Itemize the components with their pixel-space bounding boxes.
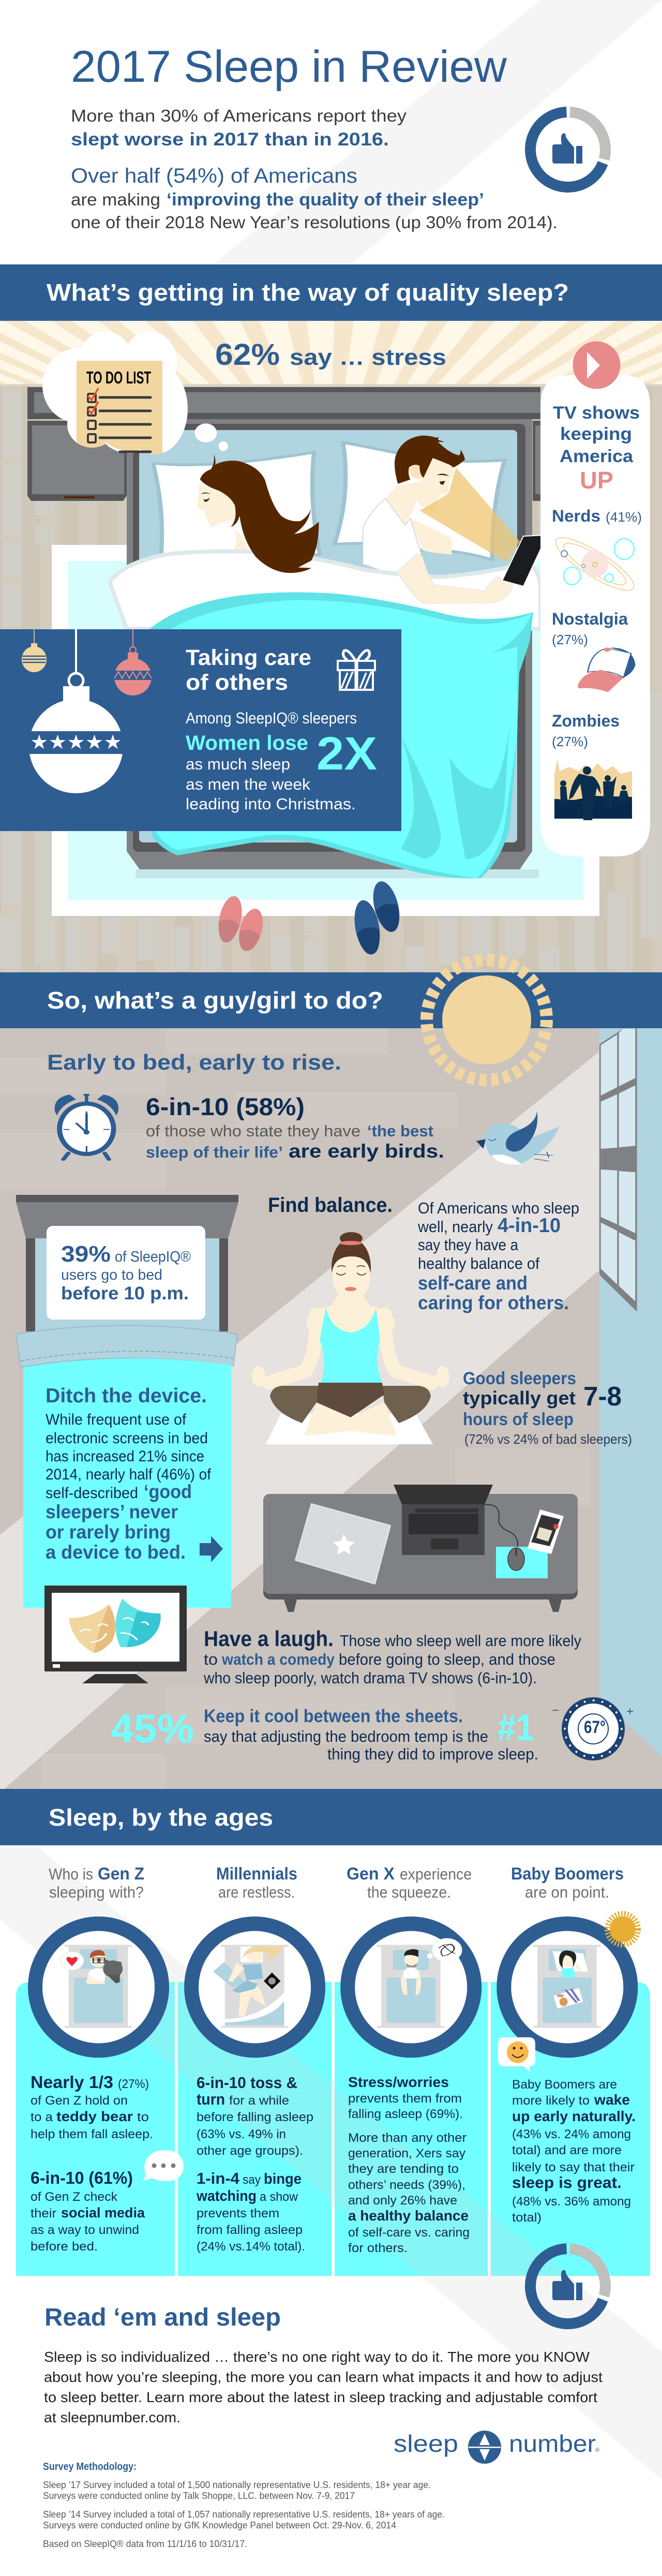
- body: While frequent use of: [46, 1411, 187, 1428]
- stat: good sleepers: 7-8: [583, 1382, 622, 1412]
- column text: baby boomers: likely to say that their: [512, 2160, 635, 2174]
- column text: gen x: Stress/worries: [348, 2074, 449, 2090]
- column text: baby boomers: total) and are more: [512, 2143, 622, 2157]
- stat text: before 10 p.m.: [61, 1283, 189, 1304]
- stat: 6-in-10 early birds: of those who state they have: [146, 1122, 360, 1140]
- TV shows heading: UP: [580, 467, 613, 494]
- heading: Ditch the device.: [46, 1385, 207, 1407]
- tablet: [502, 535, 547, 586]
- stat text: 39%: [61, 1241, 111, 1267]
- pillow right: [335, 442, 505, 560]
- section backdrop: wall with light beam: [0, 1028, 662, 1789]
- column text: millennials: other age groups).: [197, 2144, 303, 2158]
- panel: taking care of others: [0, 629, 401, 831]
- column text: gen x: for others.: [348, 2241, 408, 2255]
- diagonal grey band behind intro: [213, 0, 662, 264]
- text: have a laugh: [203, 1626, 581, 1687]
- column text: millennials: binge: [264, 2171, 302, 2187]
- survey methodology: Surveys were conducted online by GfK Knowledge Panel between Oct. 29-Nov. 6, 2014: [43, 2520, 396, 2530]
- legs: [304, 1402, 397, 1435]
- stat: 45% keep it cool: 45%: [111, 1706, 194, 1751]
- column text: millennials: watching: [196, 2188, 257, 2204]
- heading bar: so what's a guy/girl to do: [0, 972, 662, 1028]
- intro text block: are making: [71, 190, 160, 209]
- heading bar: what's getting in the way: What’s getting in the way of quality sleep?: [47, 279, 569, 306]
- column text: gen z: help them fall asleep.: [31, 2127, 153, 2141]
- icon: bird: [476, 1111, 560, 1164]
- pillow: [47, 1226, 205, 1320]
- heading bar: sleep by the ages: Sleep, by the ages: [49, 1804, 273, 1831]
- phone: [528, 1509, 564, 1554]
- stat: good sleepers: Good sleepers: [463, 1369, 576, 1388]
- column headings: Who is: [49, 1865, 93, 1883]
- text: balance stat: well, nearly: [417, 1218, 493, 1236]
- column text: gen z: before bed.: [31, 2240, 98, 2254]
- text: balance stat: [417, 1199, 579, 1313]
- closing paragraph: at sleepnumber.com.: [44, 2409, 180, 2425]
- panels: cyan generation columns: [16, 1982, 650, 2276]
- title: 2017 Sleep in Review: [71, 42, 507, 92]
- stat: 62% say stress: 62%: [215, 338, 280, 372]
- text: have a laugh: who sleep poorly, watch drama TV shows (6-in-10).: [203, 1669, 537, 1687]
- column text: millennials: 6-in-10 toss &: [197, 2074, 297, 2092]
- column text: baby boomers: total): [512, 2211, 541, 2225]
- icon: thermostat: 67°: [584, 1718, 606, 1737]
- illustration: desk with devices: [263, 1485, 578, 1612]
- stat: 45% keep it cool: [111, 1706, 538, 1763]
- illustration: gen z in bed: [61, 1945, 132, 2028]
- column text: gen z: of Gen Z check: [31, 2190, 118, 2204]
- heading: find balance: Find balance.: [268, 1194, 393, 1217]
- column headings: Millennials: [216, 1864, 297, 1883]
- icon: morning sun: [607, 1914, 638, 1945]
- heading: early to bed: Early to bed, early to rise.: [47, 1050, 341, 1074]
- nostalgia label: (27%): [552, 632, 588, 647]
- ornament small tan: [22, 629, 47, 672]
- icon: donut with thumbs up (closing): [531, 2249, 605, 2324]
- desk legs: [284, 1600, 562, 1612]
- survey methodology: Sleep ’14 Survey included a total of 1,057 nationally representative U.S. residents, 18+ years of age.: [43, 2509, 445, 2520]
- body: electronic screens in bed: [46, 1430, 208, 1447]
- illustration: baby boomer in bed: [533, 1945, 601, 2028]
- woman face: [197, 482, 251, 553]
- stat: 6-in-10 early birds: 6-in-10 (58%): [146, 1093, 305, 1120]
- closing paragraph: Sleep is so individualized … there’s no one right way to do it. The more you KNOW: [44, 2349, 590, 2365]
- icon: thermostat: +: [626, 1705, 634, 1719]
- man shirt and neck: [385, 482, 419, 525]
- stat: 6-in-10 early birds: [146, 1093, 444, 1162]
- stat: 62% say stress: say … stress: [290, 345, 446, 370]
- body: [46, 1411, 212, 1563]
- stat: 45% keep it cool: #1: [498, 1707, 534, 1749]
- column text: millennials: turn: [197, 2090, 225, 2108]
- column headings: Gen X: [347, 1864, 395, 1883]
- closing paragraph: to sleep better. Learn more about the latest in sleep tracking and adjustable comfort: [44, 2389, 597, 2405]
- column text: gen x: others’ needs (39%),: [348, 2178, 465, 2192]
- TV shows heading: TV shows: [553, 403, 640, 423]
- icon: thermostat: [552, 1697, 634, 1760]
- heading bar: so what's a guy/girl to do: So, what’s a guy/girl to do?: [47, 987, 383, 1014]
- ornament pink: [113, 629, 153, 695]
- column text: millennials: prevents them: [197, 2207, 279, 2220]
- stat: 6-in-10 early birds: sleep of their life’: [146, 1143, 283, 1161]
- column text: millennials: for a while: [229, 2094, 289, 2108]
- column headings: are restless.: [218, 1883, 295, 1901]
- column text: baby boomers: [512, 2078, 636, 2225]
- desktop: [263, 1494, 578, 1600]
- column text: gen x: prevents them from: [348, 2092, 462, 2106]
- column text: gen z: as a way to unwind: [31, 2223, 139, 2237]
- nostalgia label: [552, 610, 628, 647]
- body: 2014, nearly half (46%) of: [46, 1466, 212, 1483]
- thought bubbles: [195, 423, 217, 442]
- column text: millennials: [196, 2074, 313, 2254]
- column text: millennials: before falling asleep: [197, 2110, 313, 2124]
- bedroom scene backdrop: wall rays: [0, 321, 662, 385]
- intro text block: ‘improving the quality of their sleep’: [167, 190, 484, 210]
- couple in bed illustration: [110, 423, 547, 629]
- column text: gen z: (27%): [118, 2077, 149, 2091]
- panel heading: Taking care: [186, 645, 311, 670]
- panel stat text: [186, 709, 377, 813]
- text: balance stat: 4-in-10: [498, 1215, 561, 1237]
- column text: gen x: a healthy balance: [348, 2208, 469, 2224]
- TV shows heading: [553, 403, 640, 494]
- stat text: of SleepIQ®: [115, 1249, 191, 1265]
- column text: millennials: say: [243, 2173, 261, 2187]
- column text: baby boomers: Baby Boomers are: [512, 2078, 617, 2092]
- column text: gen x: More than any other: [348, 2131, 467, 2145]
- nerds label: [552, 507, 642, 525]
- column text: baby boomers: (48% vs. 36% among: [512, 2195, 631, 2209]
- body: or rarely bring: [46, 1521, 171, 1543]
- column text: baby boomers: wake: [594, 2092, 630, 2108]
- icon: play button: [573, 342, 621, 389]
- intro text block: slept worse in 2017 than in 2016.: [71, 129, 389, 150]
- logo: sleep number: sleep: [394, 2430, 458, 2457]
- column text: baby boomers: up early naturally.: [512, 2108, 636, 2124]
- column text: millennials: from falling asleep: [197, 2223, 303, 2237]
- closing paragraph: about how you’re sleeping, the more you can learn what impacts it and how to adjust: [44, 2369, 603, 2385]
- stat: good sleepers: typically get: [463, 1387, 576, 1409]
- column text: gen x: falling asleep (69%).: [348, 2107, 463, 2121]
- column text: gen x: and only 26% have: [348, 2194, 457, 2208]
- column text: gen z: to a: [31, 2110, 53, 2124]
- text: have a laugh: to: [204, 1650, 218, 1668]
- mouse: [508, 1548, 524, 1571]
- body: has increased 21% since: [46, 1448, 204, 1465]
- column text: gen z: of Gen Z hold on: [31, 2094, 128, 2108]
- stat: 62% say stress: [215, 338, 446, 372]
- column text: gen z: Nearly 1/3: [31, 2072, 113, 2092]
- panel stat text: as men the week: [186, 775, 311, 793]
- body: sleepers’ never: [46, 1501, 178, 1522]
- arrow: [200, 1536, 223, 1562]
- to do paper: [77, 361, 162, 459]
- woman hair: [200, 454, 319, 573]
- blanket: [150, 592, 533, 878]
- duvet: [110, 551, 540, 629]
- stat text: [61, 1241, 191, 1304]
- stat text: users go to bed: [61, 1267, 162, 1283]
- neck and shoulders: [306, 1294, 395, 1345]
- heading bar: what's getting in the way: [0, 264, 662, 321]
- body: self-described: [46, 1485, 138, 1502]
- logo: sleep number: [394, 2430, 599, 2464]
- column text: baby boomers: sleep is great.: [512, 2173, 622, 2192]
- tank top: [320, 1308, 382, 1383]
- cable: [485, 1505, 518, 1548]
- column text: millennials: 1-in-4: [197, 2169, 240, 2187]
- intro text block: More than 30% of Americans report they: [71, 106, 407, 125]
- icon: thermostat: −: [552, 1704, 559, 1718]
- column text: gen x: of self-care vs. caring: [348, 2226, 470, 2240]
- column text: baby boomers: (43% vs. 24% among: [512, 2127, 631, 2141]
- icon: pink slippers: [215, 894, 267, 954]
- nostalgia label: Nostalgia: [552, 610, 628, 628]
- text: balance stat: caring for others.: [418, 1292, 569, 1313]
- blanket fold: [16, 1326, 237, 1367]
- icon: sun: [427, 960, 547, 1080]
- closed laptop: [295, 1504, 390, 1584]
- logo: sleep number: number: [509, 2430, 596, 2457]
- floor: [0, 384, 662, 972]
- column text: millennials: (24% vs.14% total).: [197, 2240, 305, 2254]
- column text: millennials: (63% vs. 49% in: [197, 2127, 286, 2141]
- zombies label: (27%): [552, 734, 588, 749]
- open laptop: [394, 1485, 493, 1504]
- panel stat text: Among SleepIQ® sleepers: [186, 709, 357, 727]
- text: balance stat: Of Americans who sleep: [418, 1199, 579, 1217]
- arms: [269, 1314, 432, 1383]
- text: have a laugh: Have a laugh.: [204, 1626, 334, 1651]
- icon: smile bubble: [498, 2037, 535, 2071]
- icon: baseball cap: [578, 647, 636, 692]
- bed frame: [127, 419, 532, 869]
- icon: chat bubble: [142, 2150, 184, 2181]
- stat: 45% keep it cool: Keep it cool between the sheets.: [204, 1706, 463, 1726]
- zombies label: [552, 712, 620, 749]
- mouse pad: [496, 1547, 548, 1578]
- stat: 45% keep it cool: thing they did to improve sleep.: [327, 1745, 538, 1763]
- ornament large white: ★★★★★: [30, 731, 122, 753]
- nerds label: (41%): [606, 509, 642, 525]
- bed with pillow stat: [16, 1195, 238, 1367]
- intro text block: one of their 2018 New Year’s resolutions (up 30% from 2014).: [71, 213, 558, 232]
- panel heading: [186, 645, 311, 695]
- man face: [413, 458, 454, 513]
- phone light beam: [419, 467, 520, 562]
- closing paragraph: [44, 2349, 603, 2425]
- column text: gen x: [348, 2074, 470, 2255]
- survey methodology: Sleep ’17 Survey included a total of 1,500 nationally representative U.S. residents, 18+ year age.: [43, 2480, 431, 2490]
- column text: gen z: to: [137, 2110, 149, 2124]
- head: [340, 1232, 363, 1245]
- man hair: [395, 436, 465, 484]
- column text: baby boomers: more likely to: [512, 2094, 590, 2108]
- column headings: the squeeze.: [367, 1883, 451, 1901]
- column headings: [49, 1864, 624, 1901]
- panel: TV shows: [540, 342, 650, 856]
- column text: gen z: [31, 2072, 153, 2254]
- diagonal grey band behind columns: [0, 1847, 662, 2480]
- panel stat text: Women lose: [186, 732, 308, 754]
- column text: gen z: their: [31, 2207, 56, 2220]
- stat: good sleepers: (72% vs 24% of bad sleepers): [464, 1431, 632, 1447]
- icon: donut with thumbs up: [531, 112, 605, 187]
- thought cloud with to do list: [42, 331, 188, 459]
- TV shows heading: keeping: [560, 424, 632, 444]
- nightstand right: [533, 421, 540, 501]
- column text: gen z: teddy bear: [56, 2109, 133, 2124]
- ornament large white: [26, 629, 127, 793]
- panel heading: of others: [186, 670, 288, 695]
- text: balance stat: self-care and: [418, 1272, 528, 1294]
- illustration: woman meditating: [252, 1232, 449, 1444]
- column headings: sleeping with?: [49, 1883, 144, 1901]
- column headings: Gen Z: [98, 1864, 144, 1883]
- body: ‘good: [144, 1481, 192, 1502]
- intro text block: Over half (54%) of Americans: [71, 165, 357, 187]
- nerds label: Nerds: [552, 507, 600, 525]
- panel stat text: leading into Christmas.: [186, 795, 356, 813]
- column text: gen z: 6-in-10 (61%): [31, 2168, 133, 2187]
- stat: 45% keep it cool: say that adjusting the bedroom temp is the: [204, 1727, 488, 1745]
- icon: alarm clock: [55, 1094, 118, 1160]
- rings: [35, 1924, 630, 2050]
- intro text block: [71, 106, 558, 232]
- icon: blue slippers: [351, 879, 404, 956]
- heading: read em and sleep: Read ‘em and sleep: [44, 2304, 281, 2331]
- headboard: [27, 387, 540, 419]
- column text: gen x: they are tending to: [348, 2162, 459, 2176]
- text: have a laugh: watch a comedy: [221, 1650, 335, 1668]
- text: balance stat: healthy balance of: [418, 1254, 539, 1272]
- survey methodology: Survey Methodology:: [43, 2461, 137, 2473]
- to do heading: TO DO LIST: [86, 368, 151, 387]
- heading bar: sleep by the ages: [0, 1789, 662, 1845]
- illustration: millennial in bed: [213, 1945, 288, 2028]
- column headings: experience: [400, 1865, 472, 1883]
- image: zombie silhouettes: [554, 760, 632, 820]
- illustration: TV with theatre masks: [44, 1586, 187, 1683]
- rug: [52, 545, 599, 916]
- column text: millennials: a show: [260, 2190, 298, 2204]
- stat: good sleepers: [463, 1369, 632, 1447]
- stat: good sleepers: hours of sleep: [463, 1410, 574, 1429]
- stat: 6-in-10 early birds: ‘the best: [367, 1122, 433, 1140]
- survey methodology: Surveys were conducted online by Talk Shoppe, LLC. between Nov. 7-9, 2017: [43, 2491, 355, 2501]
- body: a device to bed.: [46, 1542, 186, 1563]
- text: have a laugh: Those who sleep well are more likely: [340, 1632, 581, 1650]
- TV shows heading: America: [560, 447, 634, 466]
- column headings: Baby Boomers: [511, 1864, 624, 1883]
- panel stat text: as much sleep: [186, 755, 290, 773]
- window: [599, 1028, 662, 1757]
- column headings: are on point.: [525, 1883, 609, 1901]
- panel: ditch the device: [23, 1358, 231, 1608]
- text: balance stat: say they have a: [418, 1236, 519, 1254]
- checklist: [88, 388, 151, 452]
- survey methodology: [43, 2461, 445, 2549]
- column text: gen z: social media: [61, 2205, 145, 2220]
- column text: gen x: generation, Xers say: [348, 2146, 465, 2160]
- text: have a laugh: before going to sleep, and those: [339, 1650, 555, 1668]
- logo: sleep number: ®: [595, 2447, 599, 2453]
- illustration: gen x in bed: [377, 1938, 462, 2028]
- zombies label: Zombies: [552, 712, 620, 730]
- icon: gift: [338, 650, 375, 690]
- nightstand left: [27, 421, 127, 501]
- icon: solar system: [550, 529, 640, 599]
- stat: 6-in-10 early birds: are early birds.: [289, 1141, 444, 1162]
- survey methodology: Based on SleepIQ® data from 11/1/16 to 10/31/17.: [43, 2539, 247, 2549]
- pillow left: [153, 452, 320, 557]
- panel stat text: 2X: [317, 728, 377, 780]
- man arm: [397, 554, 513, 604]
